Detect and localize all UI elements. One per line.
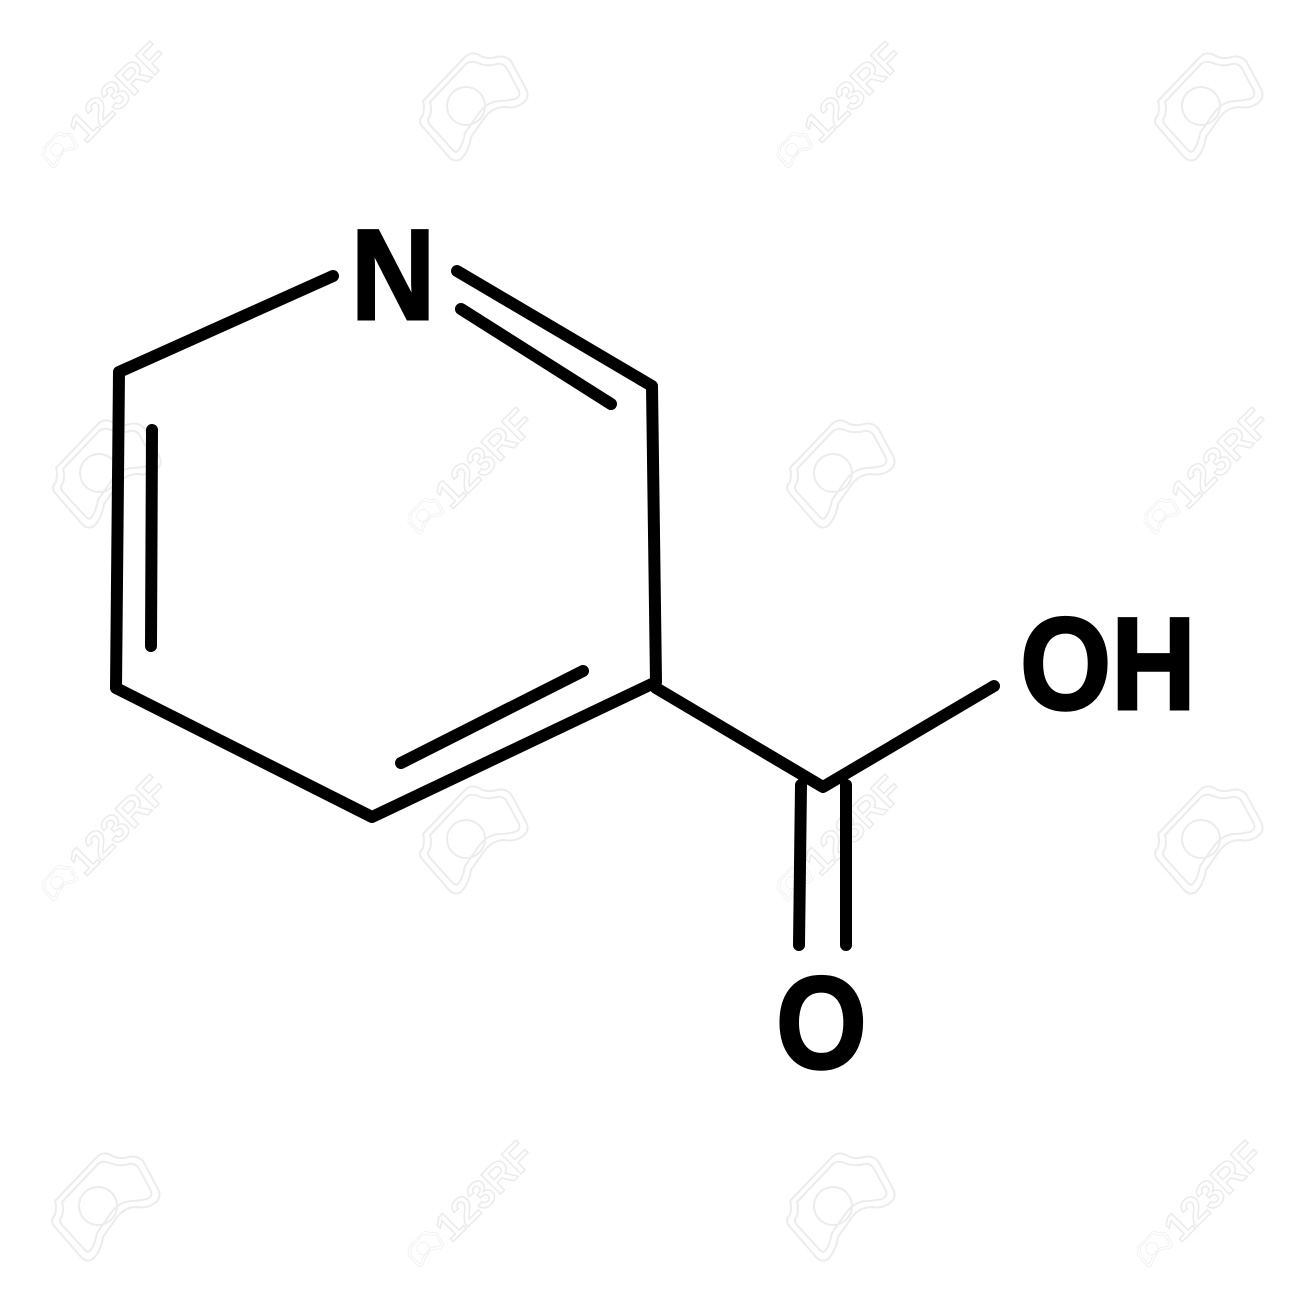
- watermark: 123RF lower centre-right: 123RF: [796, 768, 912, 884]
- watermark: 123RF mid right: 123RF: [1163, 401, 1279, 517]
- watermark: 123RF top left: [24, 32, 178, 185]
- inner double bond: upper right: [461, 309, 611, 404]
- watermark: 123RF bottom right: [1119, 1131, 1273, 1284]
- atom label: N: N: [351, 204, 435, 347]
- ring bonds: [116, 271, 656, 817]
- molecule skeleton bonds: [116, 271, 994, 945]
- watermark: 123RF lower centre-right: [759, 765, 913, 918]
- watermark: 123RF mid centre-left: [390, 398, 544, 551]
- watermark: 123RF top centre-right: 123RF: [796, 35, 912, 151]
- watermark: 123RF top left: 123RF: [61, 35, 177, 151]
- inner double bond: left: [151, 430, 152, 646]
- watermark: 123RF bottom right: 123RF: [1156, 1134, 1272, 1250]
- watermark: 123RF bottom centre-left: [390, 1131, 544, 1284]
- watermark: 123RF mid right: [1126, 398, 1280, 551]
- watermark: 123RF bottom centre-left: 123RF: [427, 1134, 543, 1250]
- atom label: O: O: [776, 951, 867, 1097]
- watermark: 123RF lower left: 123RF: [61, 768, 177, 884]
- watermark: 123RF lower left: [24, 765, 178, 918]
- atom label: OH: OH: [1020, 591, 1196, 737]
- watermark: 123RF mid centre-left: 123RF: [427, 401, 543, 517]
- bonds to carboxyl carbon and hydroxyl: [656, 686, 994, 787]
- carbonyl double bond: [799, 785, 801, 945]
- watermark: 123RF top centre-right: [759, 32, 913, 185]
- inner double bond: lower: [401, 671, 583, 763]
